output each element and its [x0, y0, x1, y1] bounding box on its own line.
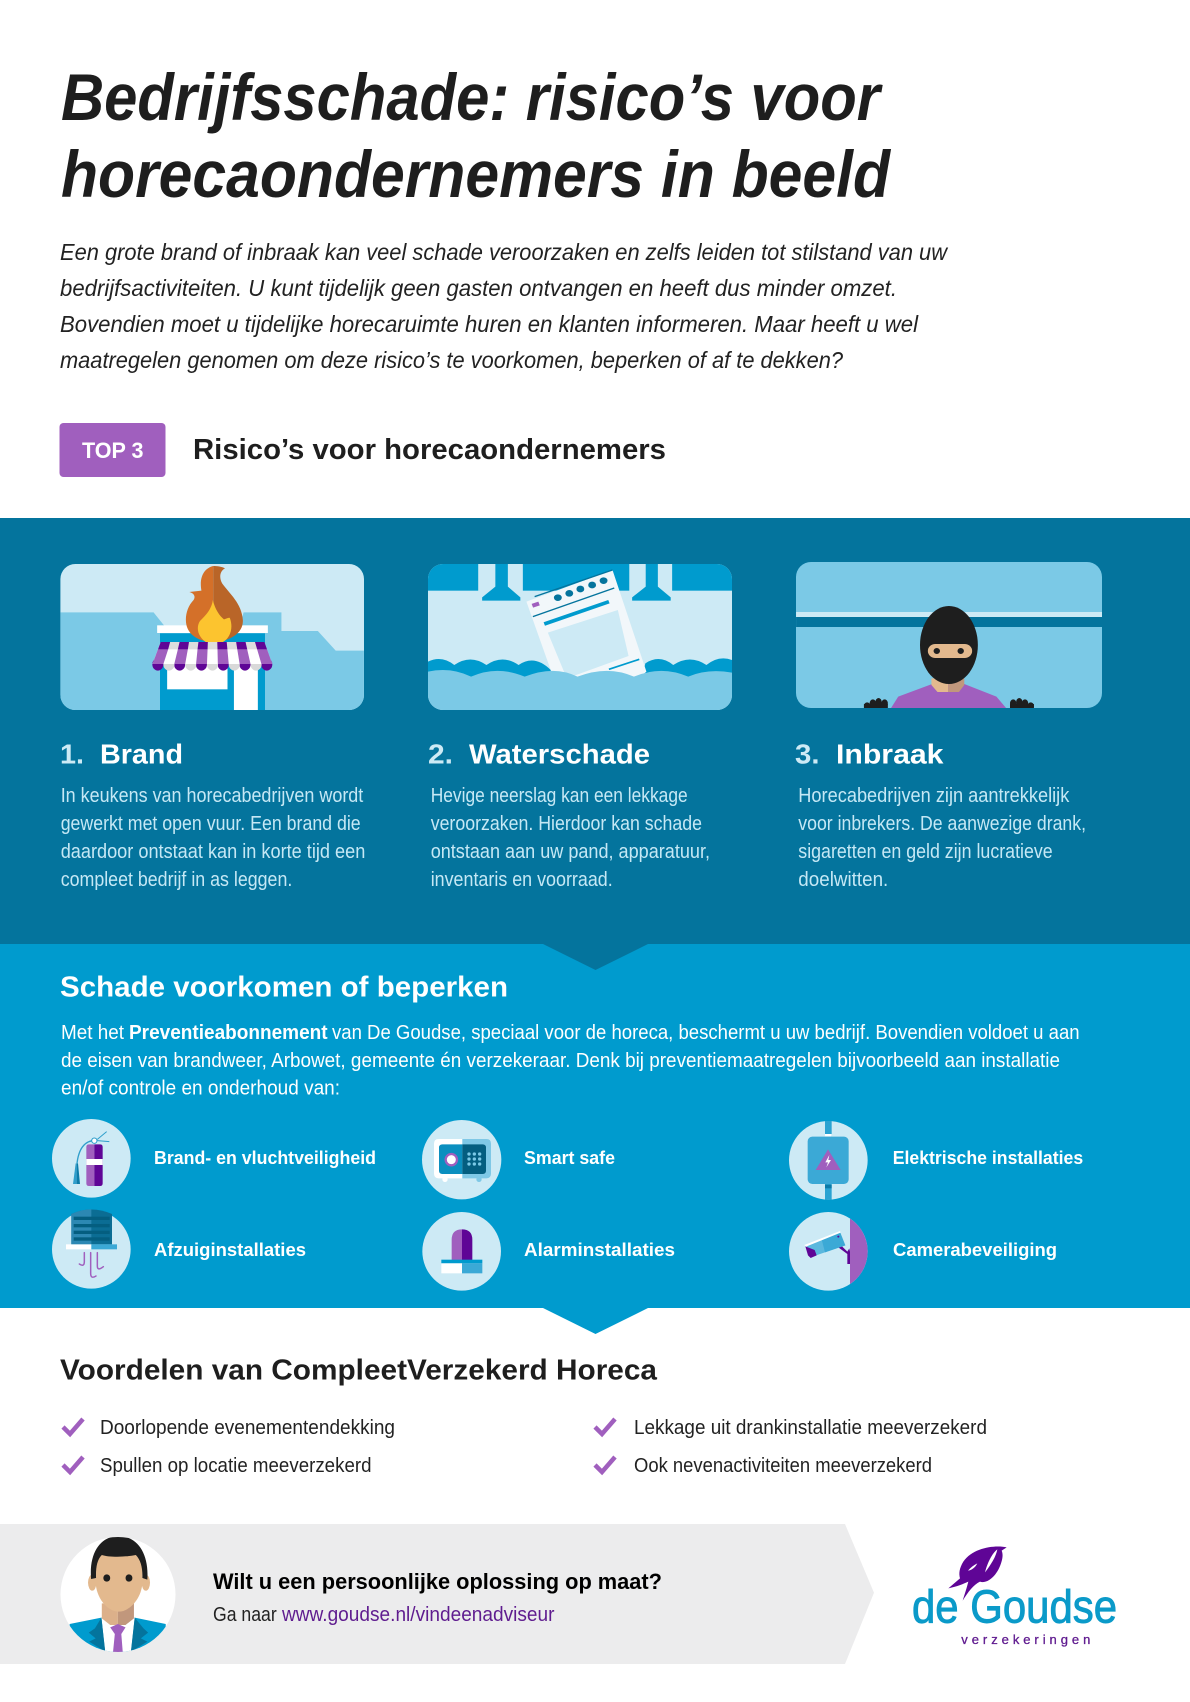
intro text [60, 239, 948, 373]
card text: inbraak: sigaretten en geld zijn lucratieve [798, 841, 1053, 863]
label: elektrische installaties: Elektrische installaties [893, 1147, 1083, 1168]
card text: brand: gewerkt met open vuur. Een brand die [61, 813, 361, 835]
icon: smart safe [422, 1120, 501, 1199]
illustration: inbraak [796, 562, 1102, 710]
card text: waterschade: 2. [428, 739, 453, 770]
intro text: maatregelen genomen om deze risico’s te voorkomen, beperken of af te dekken? [60, 347, 843, 373]
benefits list [63, 1417, 987, 1477]
heading: voordelen: Voordelen van CompleetVerzekerd Horeca [60, 1354, 658, 1386]
body text: preventie: Met het [61, 1022, 124, 1044]
card text: inbraak: Inbraak [836, 739, 944, 770]
body text: preventie: de eisen van brandweer, Arbowet, gemeente én verzekeraar. Denk bij preventiemaatregelen bijvoorbeeld aan installatie [61, 1050, 1060, 1072]
badge: top 3: TOP 3 [82, 438, 144, 463]
arrow: lower notch [543, 1308, 648, 1334]
cta link text: Ga naar [213, 1604, 277, 1626]
cta link text: www.goudse.nl/vindeenadviseur [281, 1604, 555, 1626]
title [61, 60, 892, 211]
title: Bedrijfsschade: risico’s voor [61, 60, 883, 134]
benefits list: Spullen op locatie meeverzekerd [100, 1455, 372, 1477]
benefits list: Doorlopende evenementendekking [100, 1417, 395, 1439]
body text: preventie: van De Goudse, speciaal voor de horeca, beschermt u uw bedrijf. Bovendien voldoet u aan [332, 1022, 1080, 1044]
card text: waterschade: ontstaan aan uw pand, apparatuur, [431, 841, 710, 863]
card text: brand: Brand [100, 739, 183, 770]
label: smart safe: Smart safe [524, 1147, 615, 1168]
panel: top 3 risks [0, 518, 1190, 944]
intro text: Een grote brand of inbraak kan veel schade veroorzaken en zelfs leiden tot stilstand van uw [60, 239, 948, 265]
card text: waterschade: Waterschade [469, 739, 650, 770]
icon: brandblusser [52, 1119, 131, 1198]
logo: de Goudse: verzekeringen [961, 1632, 1090, 1647]
logo: de Goudse [912, 1547, 1117, 1647]
label: alarminstallaties: Alarminstallaties [524, 1239, 675, 1260]
body text: preventie: en/of controle en onderhoud van: [61, 1078, 340, 1100]
badge: top 3 [60, 423, 166, 477]
card text: brand: In keukens van horecabedrijven wordt [61, 785, 364, 807]
benefits list: Ook nevenactiviteiten meeverzekerd [634, 1455, 932, 1477]
intro text: bedrijfsactiviteiten. U kunt tijdelijk geen gasten ontvangen en heeft dus minder omzet. [60, 275, 897, 301]
card text: brand: daardoor ontstaat kan in korte tijd een [61, 841, 365, 863]
cta heading: Wilt u een persoonlijke oplossing op maat? [213, 1569, 662, 1594]
icon: afzuiging [52, 1209, 131, 1289]
icon: camera [789, 1212, 868, 1291]
label: afzuiginstallaties: Afzuiginstallaties [154, 1239, 306, 1260]
intro text: Bovendien moet u tijdelijke horecaruimte huren en klanten informeren. Maar heeft u wel [60, 311, 919, 337]
card text: inbraak: Horecabedrijven zijn aantrekkelijk [798, 785, 1070, 807]
card text: waterschade: veroorzaken. Hierdoor kan schade [431, 813, 702, 835]
icon: adviseur avatar [60, 1536, 176, 1657]
title: horecaondernemers in beeld [61, 137, 892, 211]
card text: inbraak: doelwitten. [798, 869, 888, 891]
body text: preventie: Preventieabonnement [129, 1022, 328, 1044]
heading: schade voorkomen: Schade voorkomen of beperken [60, 972, 508, 1004]
card text: brand: 1. [60, 739, 84, 770]
benefits list: Lekkage uit drankinstallatie meeverzekerd [634, 1417, 987, 1439]
card text: waterschade: Hevige neerslag kan een lekkage [431, 785, 688, 807]
card text: brand [60, 739, 365, 891]
footer banner [0, 1524, 874, 1664]
card text: brand: compleet bedrijf in as leggen. [61, 869, 292, 891]
heading: risico's: Risico’s voor horecaondernemers [193, 434, 666, 466]
card text: inbraak [795, 739, 1086, 891]
card text: waterschade [428, 739, 710, 891]
arrow: section notch [543, 944, 648, 970]
panel: schade voorkomen [0, 944, 1190, 1308]
card text: waterschade: inventaris en voorraad. [431, 869, 613, 891]
card text: inbraak: voor inbrekers. De aanwezige drank, [798, 813, 1086, 835]
logo: de Goudse: de Goudse [912, 1581, 1117, 1633]
label: camerabeveiliging: Camerabeveiliging [893, 1239, 1057, 1260]
card text: inbraak: 3. [795, 739, 820, 770]
illustration: brand [60, 564, 364, 710]
icon: alarm [422, 1212, 501, 1291]
illustration: waterschade [428, 564, 733, 710]
label: brand- en vluchtveiligheid: Brand- en vluchtveiligheid [154, 1147, 376, 1168]
icon: elektrische installaties [789, 1121, 868, 1200]
body text: preventie [61, 1022, 1080, 1100]
